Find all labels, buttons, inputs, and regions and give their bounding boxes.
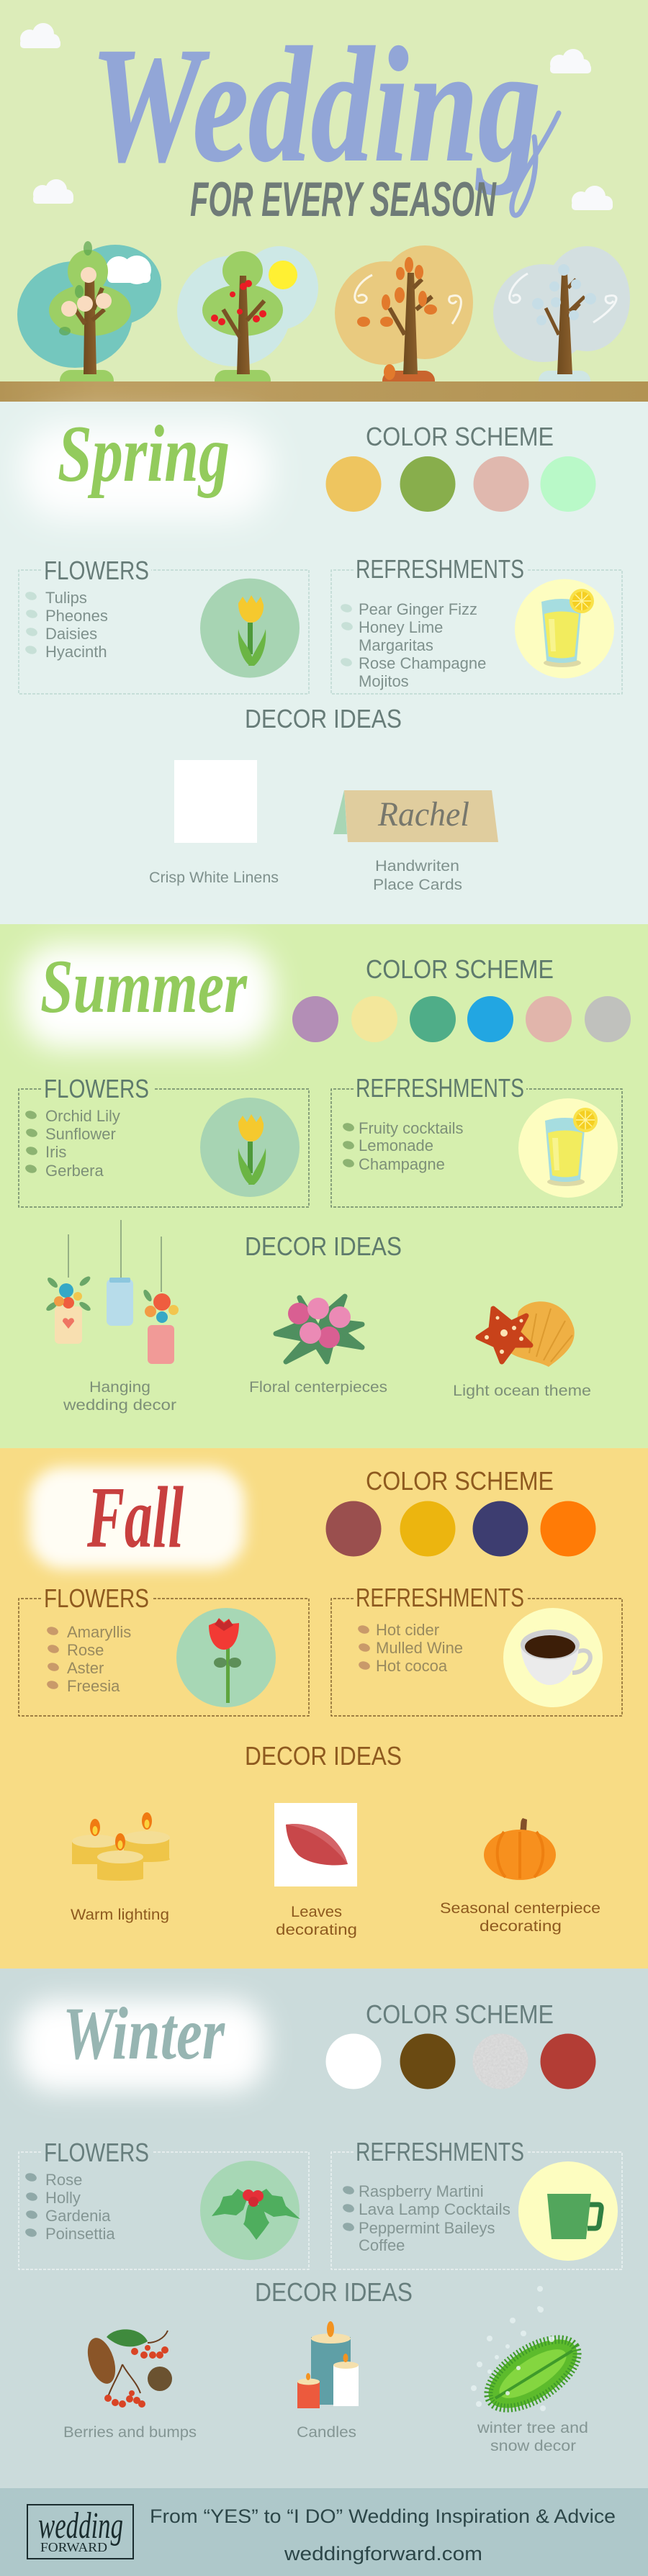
- icon: fall tree: [335, 245, 473, 394]
- decor: leaves: Leaves: [291, 1904, 342, 1920]
- decor: white linens: Crisp White Linens: [149, 869, 279, 886]
- heading: color scheme: COLOR SCHEME: [366, 1466, 554, 1496]
- flower list: Sunflower: [45, 1125, 116, 1143]
- flower list: Poinsettia: [45, 2225, 115, 2243]
- refreshments list: Peppermint Baileys: [359, 2219, 495, 2237]
- panel: refreshments: [331, 1073, 622, 1207]
- heading: flowers: FLOWERS: [44, 1074, 149, 1103]
- refreshments list: [342, 1119, 463, 1173]
- decor: place card: Rachel: [377, 795, 469, 833]
- color swatches: [325, 2034, 596, 2089]
- refreshments list: Champagne: [359, 1155, 445, 1173]
- flower list: Orchid Lily: [45, 1107, 120, 1125]
- decor: place card: Handwriten: [375, 858, 459, 875]
- color swatches: [292, 996, 631, 1042]
- icon: summer tree: [177, 246, 318, 392]
- icon: holly: [200, 2161, 300, 2260]
- panel: flowers: [19, 1583, 309, 1716]
- flower list: Iris: [45, 1143, 66, 1161]
- refreshments list: Raspberry Martini: [359, 2182, 484, 2200]
- icon: lemonade: [515, 579, 614, 678]
- panel: flowers: [19, 2138, 309, 2269]
- panel: winter: [0, 1969, 648, 2488]
- decor: winter pine and snow: [471, 2286, 588, 2454]
- heading: decor ideas: DECOR IDEAS: [245, 1231, 402, 1261]
- refreshments list: Pear Ginger Fizz: [359, 600, 477, 618]
- flower list: [46, 1623, 131, 1695]
- icon: cloud top right: [550, 49, 591, 73]
- color swatches: [325, 456, 596, 512]
- decor: hanging jars: [45, 1220, 179, 1414]
- flower list: [24, 1107, 120, 1180]
- decor: white linens: [149, 760, 279, 886]
- heading: decor ideas: DECOR IDEAS: [245, 1741, 402, 1771]
- refreshments list: Hot cider: [376, 1621, 439, 1639]
- fall glow: [29, 1467, 245, 1569]
- heading: refreshments: REFRESHMENTS: [356, 1073, 524, 1103]
- decor: hanging jars: Hanging: [89, 1379, 150, 1396]
- logo: wedding forward: FORWARD: [40, 2540, 107, 2554]
- flower list: Aster: [67, 1659, 104, 1677]
- flower list: [24, 2171, 115, 2243]
- decor: winter pine and snow: winter tree and: [477, 2420, 588, 2436]
- refreshments list: Margaritas: [359, 636, 433, 654]
- refreshments list: [342, 2182, 510, 2254]
- icon: red rose: [176, 1608, 276, 1707]
- spring glow: [22, 425, 270, 518]
- panel: refreshments: [331, 1583, 622, 1716]
- decor: candles: [297, 2321, 359, 2441]
- icon: tulip: [200, 579, 300, 678]
- decor: pumpkin: Seasonal centerpiece: [440, 1900, 600, 1917]
- refreshments list: Honey Lime: [359, 618, 443, 636]
- decor: floral centerpiece: Floral centerpieces: [249, 1379, 387, 1396]
- decor: place card: Place Cards: [373, 877, 462, 893]
- icon: lemonade: [518, 1098, 618, 1198]
- refreshments list: Lava Lamp Cocktails: [359, 2200, 510, 2218]
- decor: leaves: [274, 1803, 357, 1938]
- heading: decor ideas: DECOR IDEAS: [255, 2277, 413, 2307]
- refreshments list: Lemonade: [359, 1136, 433, 1154]
- heading: flowers: FLOWERS: [44, 556, 149, 585]
- heading: color scheme: COLOR SCHEME: [366, 1999, 554, 2029]
- decor: berries and cones: [63, 2329, 197, 2441]
- decor: warm lighting: [71, 1812, 170, 1923]
- icon: cloud lower right: [572, 186, 613, 210]
- flower list: Tulips: [45, 589, 87, 607]
- icon: winter tree: [493, 246, 630, 394]
- decor: candles: Candles: [297, 2424, 356, 2441]
- heading: Fall: Fall: [86, 1469, 184, 1566]
- icon: spring tree: [17, 241, 161, 392]
- heading: refreshments: REFRESHMENTS: [356, 2137, 524, 2166]
- refreshments list: Fruity cocktails: [359, 1119, 463, 1137]
- decor: winter pine and snow: snow decor: [490, 2438, 576, 2454]
- tagline: From “YES” to “I DO” Wedding Inspiration & Advice: [150, 2505, 616, 2527]
- panel: refreshments: [331, 2137, 622, 2269]
- heading: color scheme: COLOR SCHEME: [366, 954, 554, 984]
- panel: refreshments: [331, 554, 622, 694]
- decor: pumpkin: decorating: [480, 1918, 562, 1935]
- ground strip: [0, 381, 648, 402]
- color swatches: [325, 1501, 596, 1556]
- icon: cloud top left: [20, 23, 60, 48]
- flower list: [24, 589, 108, 661]
- panel: flowers: [19, 1074, 309, 1207]
- flower list: Gardenia: [45, 2207, 111, 2225]
- flower list: Amaryllis: [67, 1623, 131, 1641]
- refreshments list: Mojitos: [359, 672, 409, 690]
- heading: Spring: Spring: [58, 410, 230, 499]
- refreshments list: Mulled Wine: [376, 1639, 463, 1657]
- decor: floral centerpiece: [249, 1296, 387, 1396]
- refreshments list: Rose Champagne: [359, 654, 486, 672]
- heading: color scheme: COLOR SCHEME: [366, 422, 554, 451]
- refreshments list: [357, 1621, 463, 1675]
- panel: spring: [0, 402, 648, 924]
- panel: summer: [0, 924, 648, 1448]
- flower list: Gerbera: [45, 1162, 104, 1180]
- heading: flowers: FLOWERS: [44, 2138, 149, 2167]
- flower list: Holly: [45, 2189, 81, 2207]
- decor: warm lighting: Warm lighting: [71, 1907, 169, 1923]
- refreshments list: [340, 600, 486, 690]
- winter glow: [18, 1999, 266, 2092]
- icon: tulip: [200, 1098, 300, 1197]
- flower list: Pheones: [45, 607, 108, 625]
- logo: wedding forward: [27, 2505, 133, 2559]
- heading: Summer: Summer: [40, 944, 248, 1029]
- decor: ocean shell and starfish: [453, 1301, 591, 1399]
- decor: leaves: decorating: [276, 1922, 357, 1938]
- flower list: Rose: [67, 1641, 104, 1659]
- icon: green mug: [518, 2161, 618, 2261]
- panel: fall: [0, 1448, 648, 1969]
- heading: Winter: Winter: [63, 1992, 225, 2075]
- heading: flowers: FLOWERS: [44, 1583, 149, 1613]
- decor: pumpkin: [440, 1818, 600, 1935]
- website: weddingforward.com: [284, 2543, 482, 2564]
- flower list: Hyacinth: [45, 643, 107, 661]
- flower list: Rose: [45, 2171, 82, 2189]
- panel: header: [0, 0, 648, 402]
- flower list: Freesia: [67, 1677, 120, 1695]
- refreshments list: Hot cocoa: [376, 1657, 448, 1675]
- heading: refreshments: REFRESHMENTS: [356, 1583, 524, 1612]
- decor: hanging jars: wedding decor: [63, 1397, 176, 1414]
- panel: flowers: [19, 556, 309, 694]
- refreshments list: Coffee: [359, 2236, 405, 2254]
- summer glow: [20, 944, 274, 1049]
- panel: footer: [0, 2488, 648, 2576]
- title swash: [512, 113, 559, 215]
- icon: coffee cup: [503, 1608, 603, 1707]
- flower list: Daisies: [45, 625, 97, 643]
- heading: decor ideas: DECOR IDEAS: [245, 704, 402, 733]
- decor: place card: [333, 790, 498, 893]
- icon: cloud lower left: [33, 179, 73, 204]
- heading: refreshments: REFRESHMENTS: [356, 554, 524, 584]
- decor: ocean shell and starfish: Light ocean theme: [453, 1383, 591, 1399]
- decor: berries and cones: Berries and bumps: [63, 2424, 197, 2441]
- logo: wedding forward: wedding: [38, 2505, 123, 2546]
